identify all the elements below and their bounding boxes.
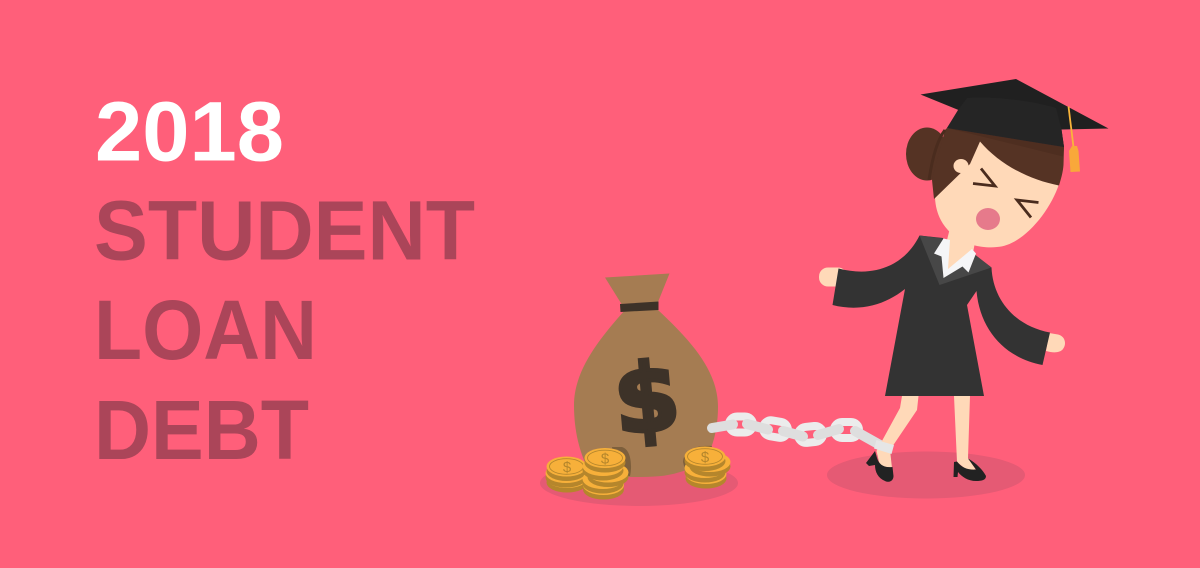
coin shadows (612, 446, 712, 480)
coin stack: right: $ (701, 449, 710, 466)
title: year: 2018 (95, 84, 284, 178)
left shoe (866, 451, 894, 482)
dollar sign: $ (610, 342, 684, 457)
title: debt: DEBT (94, 383, 309, 477)
shirt collar (934, 238, 976, 278)
bag body (574, 310, 718, 477)
tassel cord (1068, 106, 1074, 147)
left eye (973, 168, 995, 186)
chain ring links (729, 416, 859, 444)
left leg (876, 396, 918, 468)
coin stack: middle: $ (601, 450, 610, 468)
right leg (954, 396, 976, 471)
ear (954, 159, 968, 173)
graduation cap (920, 79, 1108, 172)
cap board (920, 79, 1108, 147)
coin stack: middle (582, 448, 628, 500)
hair (932, 128, 1064, 199)
gown collar (920, 236, 992, 285)
tassel end (1069, 146, 1080, 172)
right shoe (954, 458, 986, 481)
coin stack: right (684, 446, 730, 488)
coin stack: left (546, 456, 588, 492)
title (94, 84, 475, 477)
right hand (1046, 333, 1065, 352)
bag top flap (605, 274, 670, 304)
hair bun (906, 128, 948, 180)
left hand (819, 268, 847, 286)
title: loan: LOAN (94, 283, 317, 377)
head (935, 135, 1059, 247)
graduate shadow (827, 452, 1025, 498)
gown (832, 236, 1050, 396)
graduate figure (819, 79, 1108, 482)
chain bar links (712, 424, 880, 445)
tassel (1068, 106, 1080, 172)
hair fringe shading (947, 128, 1064, 156)
coin stack: left: $ (563, 459, 572, 476)
mouth (976, 208, 1000, 230)
ankle cuff (874, 440, 894, 454)
ground shadow under bag (540, 460, 738, 506)
money bag illustration (540, 274, 738, 506)
neck (943, 228, 975, 272)
chain (712, 416, 880, 445)
cap base (947, 97, 1064, 147)
hair band shading (929, 130, 945, 180)
bag tie (620, 302, 658, 312)
title: student: STUDENT (94, 184, 475, 278)
right eye (1017, 200, 1038, 218)
